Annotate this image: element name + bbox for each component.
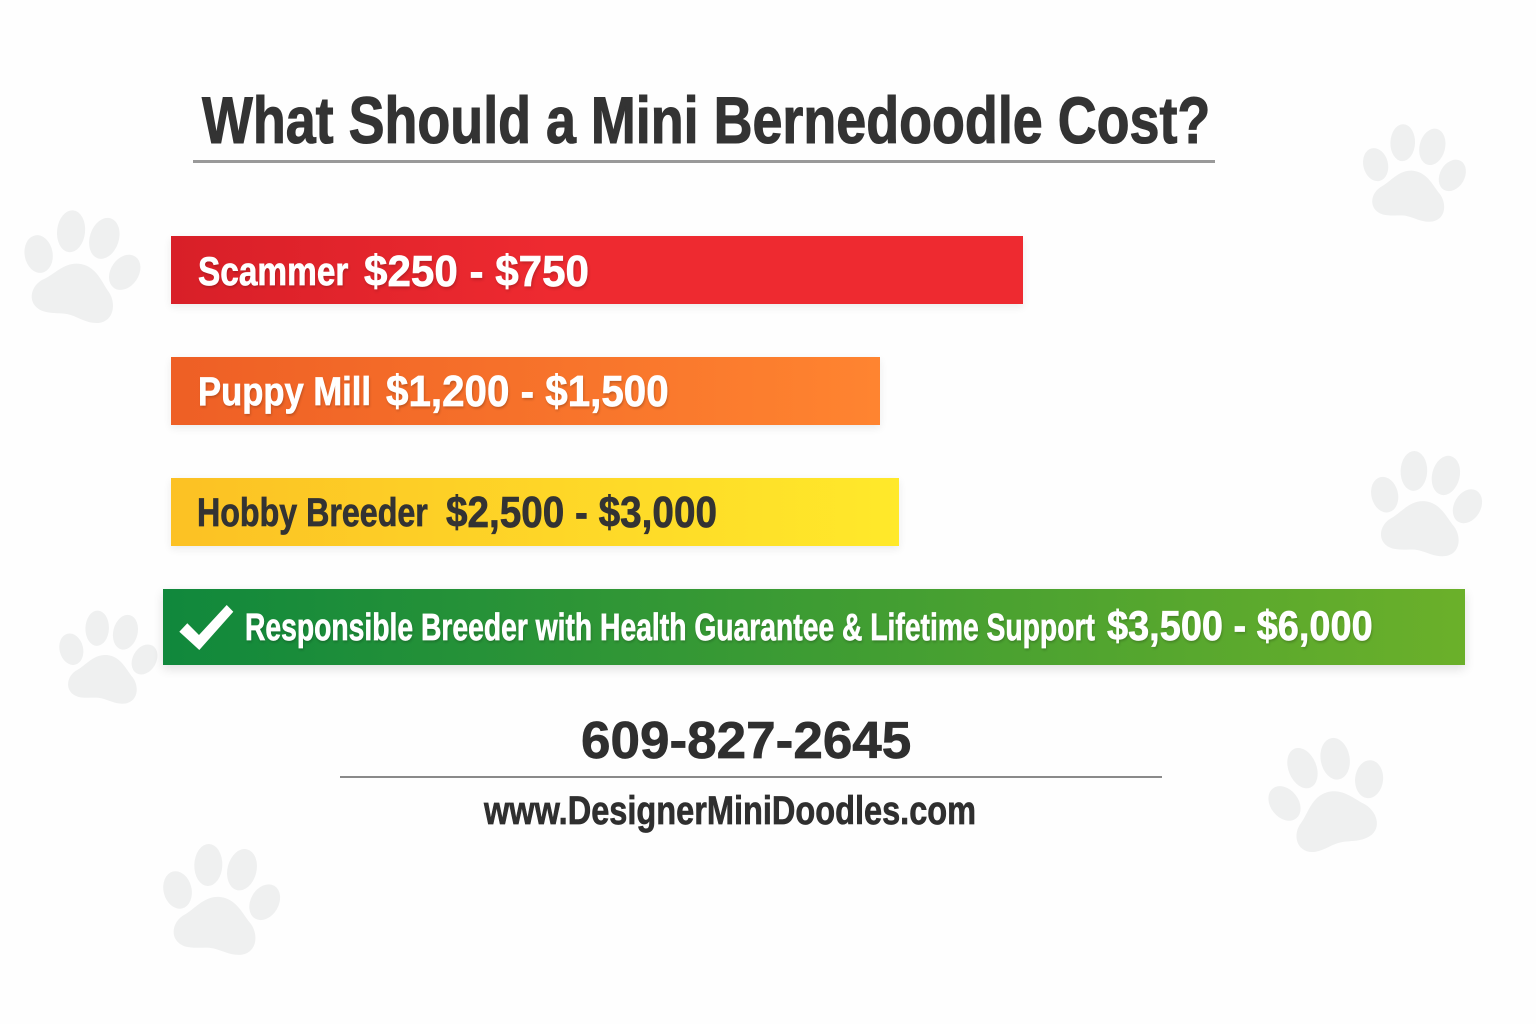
paw: middle right bbox=[1358, 444, 1493, 562]
paw: lower right bbox=[1251, 724, 1404, 863]
label: puppy mill: Puppy Mill bbox=[198, 370, 371, 414]
phone number: 609-827-2645 bbox=[581, 712, 911, 770]
icon: check mark bbox=[179, 605, 234, 650]
paw: lower left bbox=[150, 836, 292, 961]
price: scammer: $250 - $750 bbox=[364, 247, 589, 296]
bar: responsible breeder bbox=[163, 589, 1465, 665]
paw: upper left bbox=[7, 200, 155, 331]
price: responsible breeder: $3,500 - $6,000 bbox=[1107, 602, 1373, 649]
label: responsible breeder: Responsible Breeder with Health Guarantee & Lifetime Support bbox=[245, 607, 1095, 649]
label: scammer: Scammer bbox=[198, 250, 348, 294]
paw: middle left bbox=[48, 604, 167, 709]
label: hobby breeder: Hobby Breeder bbox=[197, 491, 428, 535]
bar: puppy mill bbox=[171, 357, 880, 425]
title: What Should a Mini Bernedoodle Cost? bbox=[202, 83, 1210, 157]
bar: scammer bbox=[171, 236, 1023, 304]
price: puppy mill: $1,200 - $1,500 bbox=[386, 367, 669, 416]
paw: top right bbox=[1351, 117, 1476, 227]
website: www.DesignerMiniDoodles.com bbox=[484, 789, 976, 833]
bar: hobby breeder bbox=[171, 478, 899, 546]
price: hobby breeder: $2,500 - $3,000 bbox=[446, 488, 717, 537]
